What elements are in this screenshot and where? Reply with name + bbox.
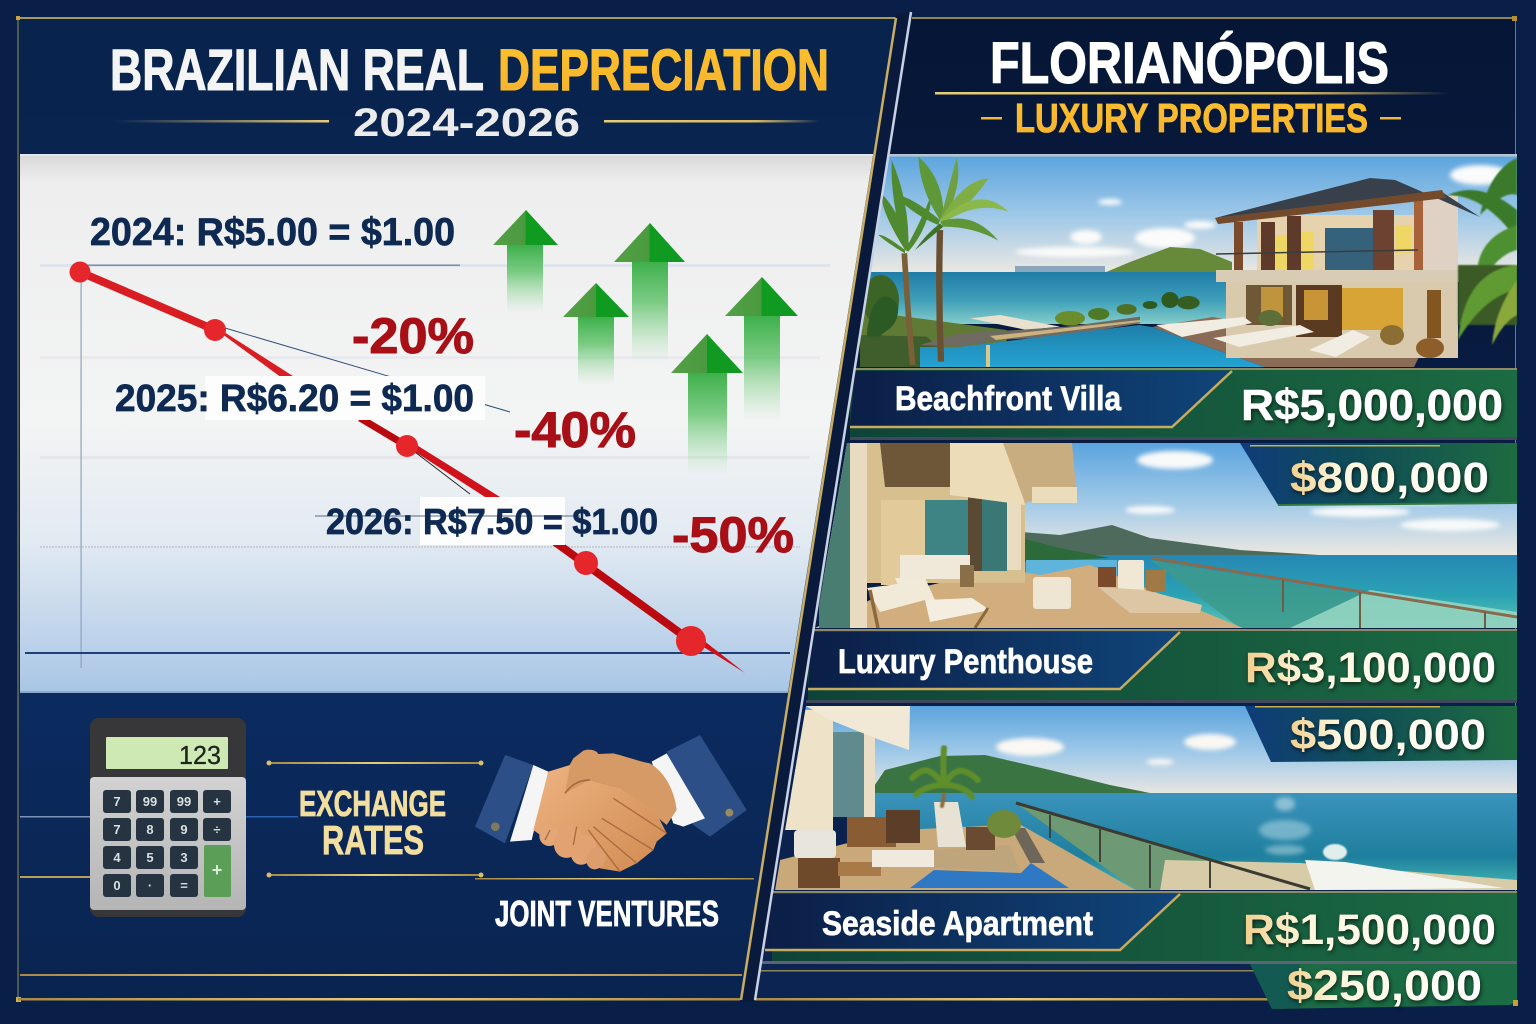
calculator keys: 7 [113, 822, 121, 837]
calculator keys [103, 790, 231, 897]
distant hill [1106, 247, 1232, 272]
footer bar lines [754, 970, 1270, 1000]
photo: beachfront villa [850, 155, 1520, 370]
calculator keys: 3 [180, 850, 188, 865]
photo frame line [889, 154, 1517, 156]
text block: exchange rates [266, 760, 484, 878]
terrace furniture [794, 802, 1021, 888]
label: joint ventures: JOINT VENTURES [495, 893, 719, 934]
upper hand [565, 750, 677, 825]
calculator keys: 7 [113, 794, 121, 809]
calculator keys: 9 [180, 822, 188, 837]
calculator display: 123: 123 [179, 740, 221, 770]
property name: Seaside Apartment [822, 905, 1093, 943]
swimming pool [920, 325, 1265, 367]
text block: exchange rates: RATES [322, 817, 424, 863]
calculator keys: 8 [146, 822, 154, 837]
photo: luxury penthouse [810, 443, 1521, 629]
percentage: -50%: -50% [672, 507, 794, 563]
icon: handshake [475, 735, 747, 873]
foreground landscaping [860, 275, 1200, 370]
chart grid and axes [25, 264, 830, 668]
lower hand [533, 765, 667, 872]
heading: Brazilian Real Depreciation: BRAZILIAN REAL [110, 38, 484, 103]
calculator keys: + [213, 794, 221, 809]
tag: $800,000 [1240, 443, 1517, 506]
heading: Brazilian Real Depreciation [110, 38, 829, 103]
strip: beachfront villa [850, 368, 1517, 440]
chart: depreciation line [70, 262, 745, 673]
terrace [815, 565, 1243, 628]
calculator keys: + [212, 860, 222, 880]
roof [1215, 178, 1480, 218]
tag: $800,000: $800,000 [1290, 454, 1489, 502]
green hill [875, 755, 1150, 793]
strip: seaside apartment [762, 891, 1517, 964]
subheading: luxury properties: LUXURY PROPERTIES [1015, 95, 1368, 141]
label: 2025 rate: 2025: R$6.20 = $1.00 [115, 378, 474, 420]
palm trees right [1448, 158, 1518, 345]
tag: $250,000 [1250, 962, 1518, 1010]
panel: Brazilian Real depreciation [16, 16, 896, 1002]
divider: diagonal gold and silver stripe [740, 12, 912, 1002]
calculator keys: 99 [143, 794, 157, 809]
building [785, 706, 910, 830]
calculator keys: = [180, 878, 188, 893]
icon: calculator [20, 718, 298, 917]
terrace [775, 825, 1137, 891]
price in reais: R$1,500,000 [1243, 906, 1496, 954]
percentage: -20%: -20% [352, 308, 474, 364]
property name: Luxury Penthouse [838, 643, 1093, 681]
percentage: -40%: -40% [514, 402, 636, 458]
heading: Florianópolis: FLORIANÓPOLIS [990, 31, 1389, 96]
tag: $500,000 [1245, 706, 1517, 762]
calculator keys: 0 [113, 878, 121, 893]
mountains [1021, 525, 1335, 556]
glass railing [1151, 558, 1517, 617]
heading: Brazilian Real Depreciation: DEPRECIATION [498, 38, 829, 103]
villa [1156, 178, 1480, 358]
label: 2024 rate: 2024: R$5.00 = $1.00 [90, 211, 455, 254]
palm [912, 748, 978, 806]
panel: Florianópolis luxury properties [754, 16, 1521, 1010]
strip: luxury penthouse [806, 629, 1517, 703]
building [810, 443, 1077, 628]
terrace furniture [867, 555, 1202, 628]
lounge chairs [1156, 317, 1252, 337]
price in reais: R$5,000,000 [1241, 381, 1503, 430]
price in reais: R$3,100,000 [1245, 644, 1496, 692]
text block: exchange rates: EXCHANGE [299, 783, 446, 824]
glass railing [1016, 803, 1310, 889]
calculator keys: ÷ [213, 822, 221, 837]
glass railing water [1150, 560, 1359, 628]
calculator keys: 4 [113, 850, 121, 865]
calculator keys: 5 [146, 850, 154, 865]
panel: exchange rate chart [20, 154, 873, 693]
tag: $500,000: $500,000 [1290, 711, 1486, 759]
property name: Beachfront Villa [895, 380, 1122, 418]
label: 2026 rate: 2026: R$7.50 = $1.00 [326, 501, 658, 542]
calculator keys: 99 [177, 794, 191, 809]
palm trees [867, 157, 1008, 365]
tag: $250,000: $250,000 [1287, 962, 1482, 1010]
calculator keys: · [148, 878, 152, 893]
icon: green up arrows [493, 210, 798, 475]
railing foreground and beach [1020, 806, 1208, 890]
photo: seaside apartment [770, 706, 1520, 891]
subheading: 2024-2026: 2024-2026 [353, 101, 580, 145]
